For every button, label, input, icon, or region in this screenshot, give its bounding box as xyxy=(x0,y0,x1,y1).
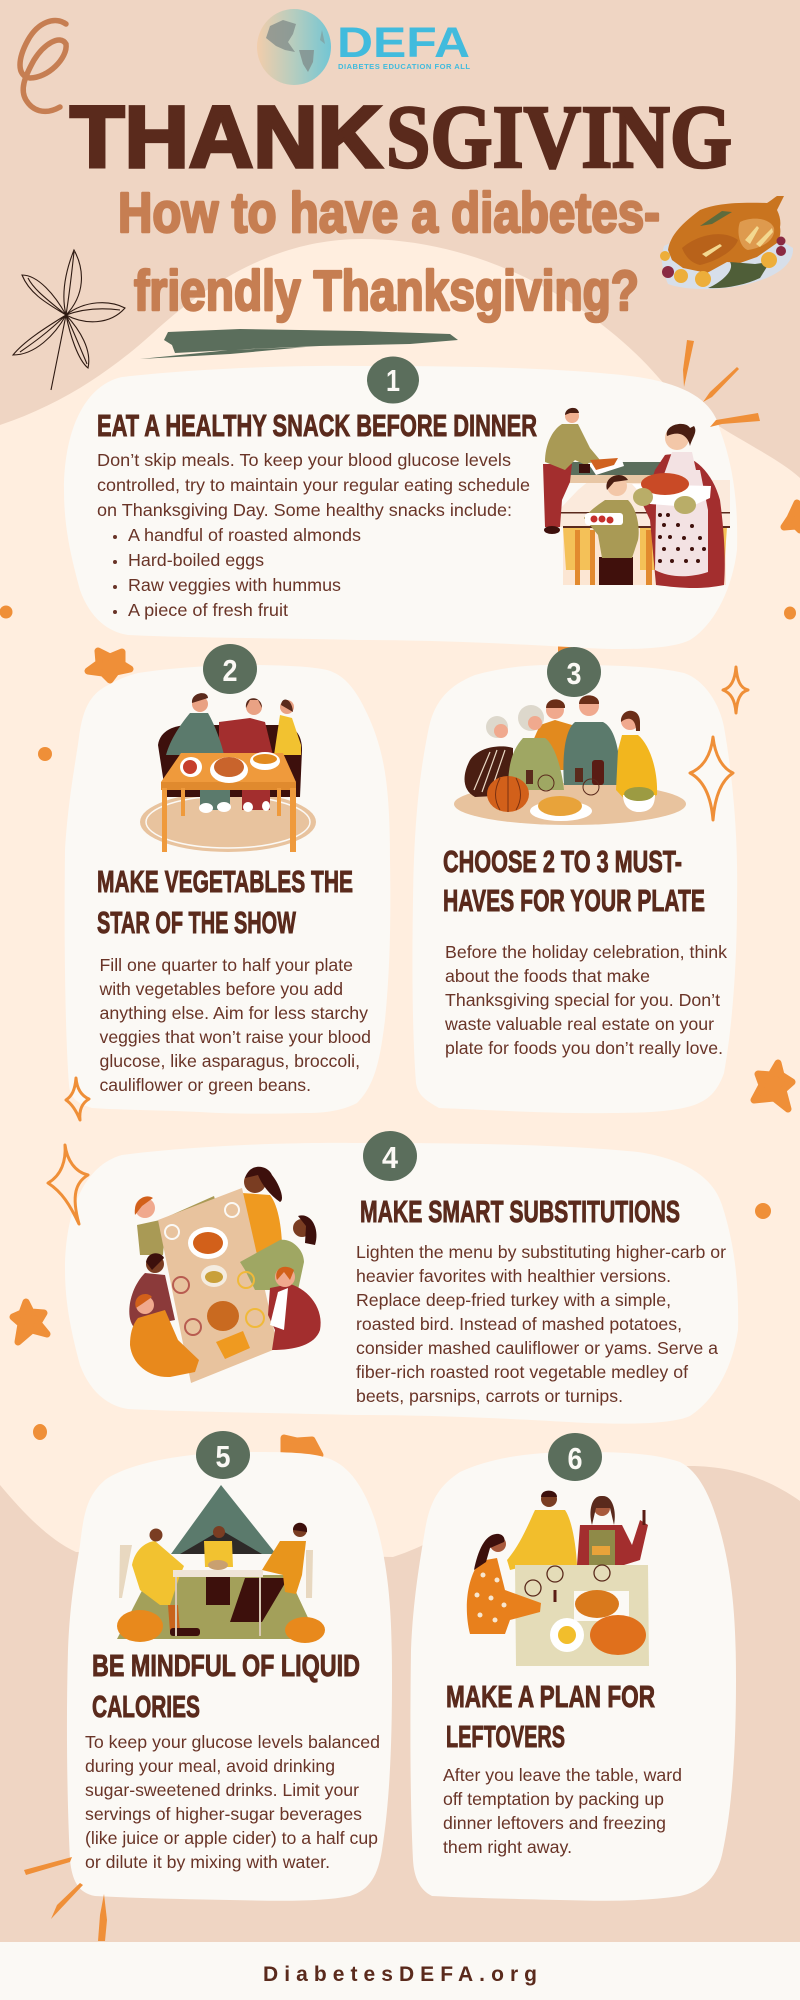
heading xyxy=(97,864,353,940)
text block: with vegetables before you add xyxy=(98,979,343,999)
heading xyxy=(92,1648,360,1724)
text block: controlled, try to maintain your regular eating schedule xyxy=(97,475,530,495)
number badge xyxy=(363,1131,417,1181)
background: top tan shape xyxy=(0,0,800,478)
text block: sugar-sweetened drinks. Limit your xyxy=(85,1780,359,1800)
heading: EAT A HEALTHY SNACK BEFORE DINNER xyxy=(97,408,537,443)
text block: Don’t skip meals. To keep your blood glucose levels xyxy=(97,450,511,470)
decoration: star over card 2 xyxy=(88,651,130,680)
number badge: 5 xyxy=(216,1439,230,1474)
background: bottom tan shape xyxy=(0,1466,800,1942)
illustration: family serving dinner xyxy=(543,408,730,588)
card background xyxy=(65,665,390,1114)
decoration: small sparkle lower left xyxy=(66,1078,89,1120)
subtitle: friendly Thanksgiving? xyxy=(134,259,639,323)
decoration: dashes bottom left xyxy=(24,1857,107,1941)
number badge xyxy=(203,644,257,694)
text block xyxy=(443,1765,682,1857)
number badge xyxy=(547,647,601,697)
text block: Raw veggies with hummus xyxy=(128,575,341,595)
text block: fiber-rich roasted root vegetable medley of xyxy=(356,1362,688,1382)
number badge: 4 xyxy=(382,1140,399,1175)
text block: dinner leftovers and freezing xyxy=(443,1813,666,1833)
text block: cauliflower or green beans. xyxy=(100,1075,311,1095)
heading: MAKE A PLAN FOR xyxy=(446,1679,655,1714)
decoration: sparkle step 4 xyxy=(48,1145,88,1224)
card background xyxy=(412,665,737,1113)
subtitle xyxy=(118,181,660,323)
text block: veggies that won’t raise your blood xyxy=(100,1027,371,1047)
text block: Thanksgiving special for you. Don’t xyxy=(445,990,720,1010)
illustration: dinner at tent xyxy=(117,1485,325,1643)
number badge xyxy=(196,1431,250,1479)
subtitle: How to have a diabetes- xyxy=(118,181,660,245)
text block: Before the holiday celebration, think xyxy=(445,942,727,962)
illustration: friends toasting xyxy=(467,1491,649,1666)
footer xyxy=(0,1942,800,2000)
text block: on Thanksgiving Day. Some healthy snacks include: xyxy=(97,500,512,520)
text block xyxy=(356,1242,726,1406)
decoration: green brush stroke xyxy=(140,329,458,359)
text block: Fill one quarter to half your plate xyxy=(100,955,353,975)
text block: servings of higher-sugar beverages xyxy=(85,1804,362,1824)
title: SGIVING xyxy=(386,88,732,187)
text block: waste valuable real estate on your xyxy=(444,1014,714,1034)
card background xyxy=(67,1452,392,1901)
text block: To keep your glucose levels balanced xyxy=(85,1732,380,1752)
text block: A handful of roasted almonds xyxy=(128,525,361,545)
illustration: friends at long table xyxy=(129,1167,321,1383)
decoration: dashes top right xyxy=(683,340,760,427)
text block: glucose, like asparagus, broccoli, xyxy=(100,1051,360,1071)
title: THANK xyxy=(70,89,382,186)
panel: step 3 xyxy=(412,647,737,1113)
text block xyxy=(85,1732,380,1872)
text block: A piece of fresh fruit xyxy=(128,600,288,620)
text block: After you leave the table, ward xyxy=(443,1765,682,1785)
decoration: orange dots and stars behind cards xyxy=(0,503,800,1456)
footer website: DiabetesDEFA.org xyxy=(263,1963,537,1986)
logo wordmark: DEFA xyxy=(337,19,470,67)
heading: MAKE VEGETABLES THE xyxy=(97,864,353,899)
heading: CHOOSE 2 TO 3 MUST- xyxy=(443,844,682,879)
heading: LEFTOVERS xyxy=(446,1719,565,1754)
panel: step 2 xyxy=(65,644,390,1114)
number badge xyxy=(367,356,419,404)
text block: anything else. Aim for less starchy xyxy=(100,1003,368,1023)
text block: Lighten the menu by substituting higher-carb or xyxy=(356,1242,726,1262)
card background xyxy=(64,366,737,649)
heading: STAR OF THE SHOW xyxy=(97,905,296,940)
text block: during your meal, avoid drinking xyxy=(85,1756,335,1776)
number badge: 6 xyxy=(568,1441,582,1476)
logo globe xyxy=(257,9,331,85)
text block: about the foods that make xyxy=(445,966,650,986)
number badge: 3 xyxy=(566,656,582,691)
heading xyxy=(443,844,705,918)
icon: roast turkey xyxy=(660,196,793,289)
heading xyxy=(446,1679,655,1754)
text block: beets, parsnips, carrots or turnips. xyxy=(356,1386,623,1406)
text block: roasted bird. Instead of mashed potatoes, xyxy=(356,1314,682,1334)
text block: (like juice or apple cider) to a half cup xyxy=(85,1828,378,1848)
text block xyxy=(97,450,530,620)
text block: plate for foods you don’t really love. xyxy=(445,1038,723,1058)
text block: them right away. xyxy=(443,1837,572,1857)
number badge: 1 xyxy=(386,363,400,398)
text block: consider mashed cauliflower or yams. Serve a xyxy=(356,1338,718,1358)
text block: or dilute it by mixing with water. xyxy=(85,1852,330,1872)
logo tagline: DIABETES EDUCATION FOR ALL xyxy=(338,62,470,71)
text block: heavier favorites with healthier versions. xyxy=(356,1266,671,1286)
panel: step 4 xyxy=(65,1131,738,1424)
heading: CALORIES xyxy=(92,1689,200,1724)
heading: BE MINDFUL OF LIQUID xyxy=(92,1648,360,1683)
decoration: big sparkle xyxy=(690,737,733,820)
decoration: orange curl xyxy=(20,21,66,111)
panel: step 5 xyxy=(67,1431,392,1901)
text block: Hard-boiled eggs xyxy=(128,550,264,570)
panel: step 1 xyxy=(64,356,737,649)
text block xyxy=(98,955,371,1095)
number badge: 2 xyxy=(222,653,238,688)
panel: step 6 xyxy=(410,1433,736,1901)
text block: off temptation by packing up xyxy=(443,1789,664,1809)
logo: DEFA xyxy=(257,9,470,85)
decoration: line flower xyxy=(13,250,125,390)
illustration: family around table xyxy=(454,695,686,825)
card background xyxy=(410,1452,736,1901)
title xyxy=(70,88,732,187)
illustration: couple at table xyxy=(140,693,316,852)
text block xyxy=(444,942,727,1058)
card background xyxy=(65,1143,738,1424)
number badge xyxy=(548,1433,602,1481)
text block: Replace deep-fried turkey with a simple, xyxy=(356,1290,671,1310)
